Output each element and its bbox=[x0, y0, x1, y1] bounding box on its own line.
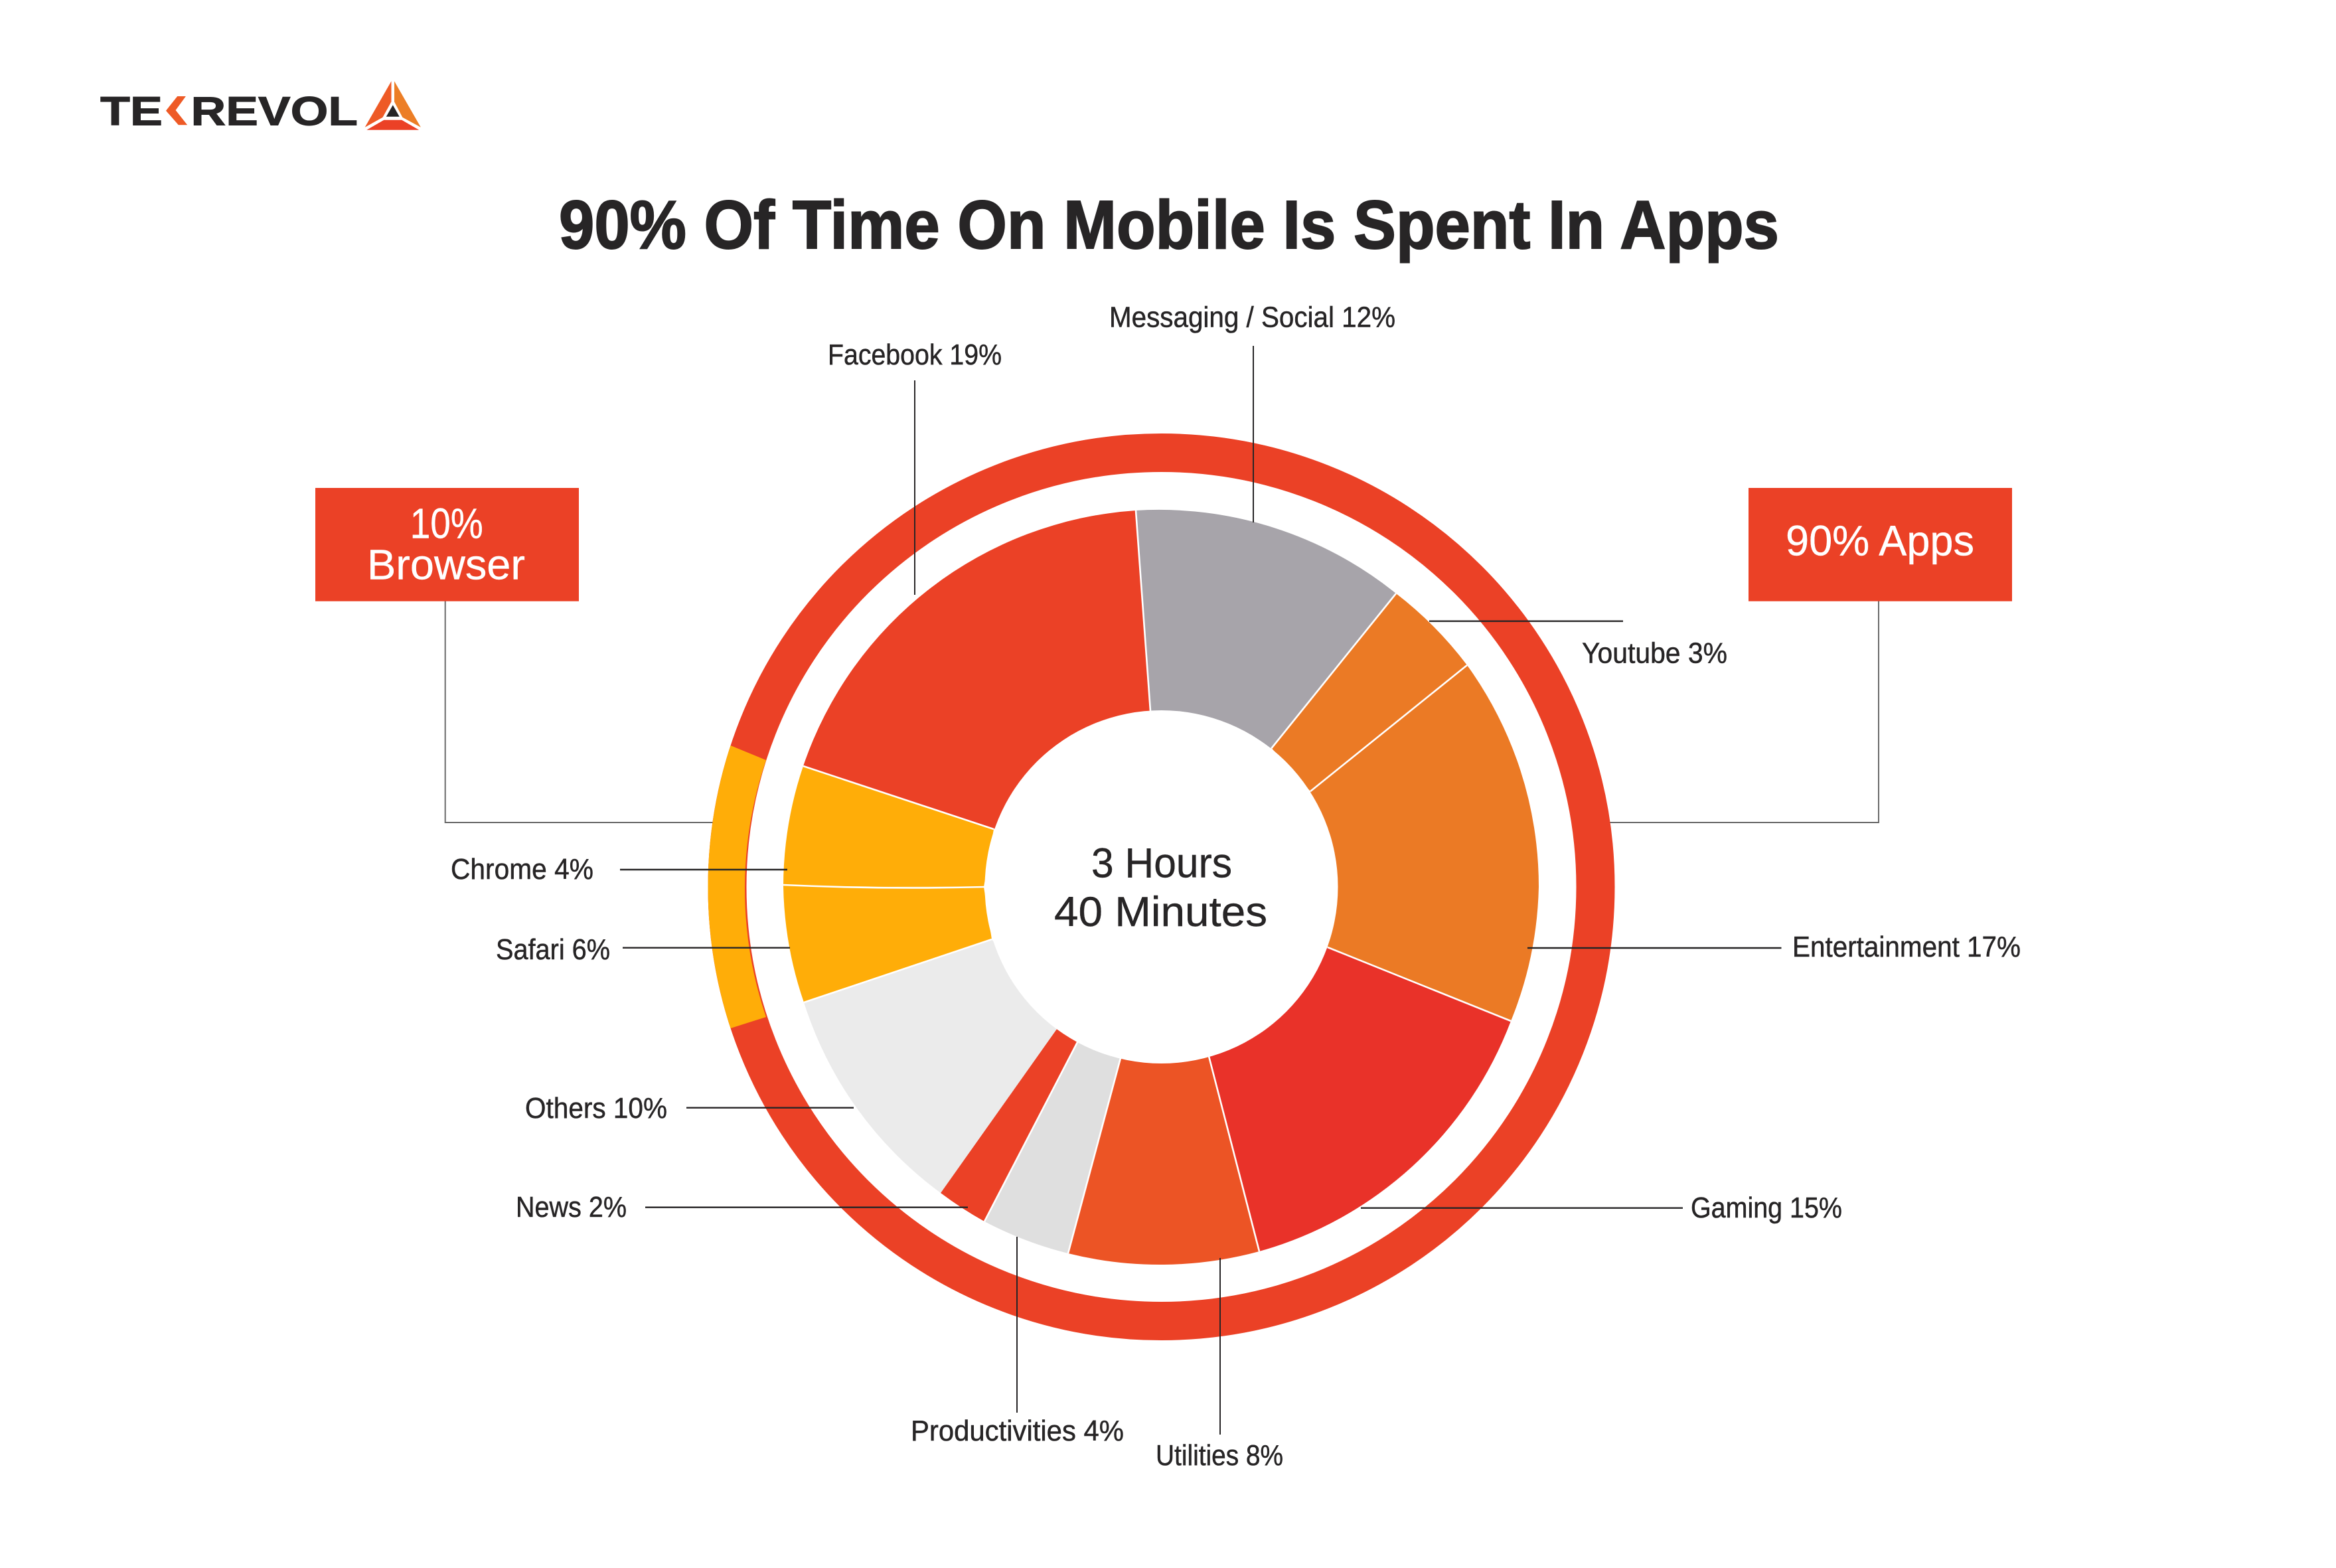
slice separators bbox=[783, 510, 1511, 1253]
connector: apps box to outer ring bbox=[1606, 601, 1879, 823]
outer ring segment: browser 10% bbox=[708, 745, 766, 1028]
center label: 3 Hours bbox=[1091, 840, 1232, 887]
leader and label: Chrome: Chrome 4% bbox=[451, 853, 593, 886]
slice: Facebook bbox=[803, 510, 1150, 829]
donut chart bbox=[783, 510, 1539, 1265]
callout box: 90% Apps bbox=[1749, 488, 2012, 601]
callout box: 10% Browser: 10% bbox=[410, 500, 483, 548]
leader and label: Utilities: Utilities 8% bbox=[1156, 1439, 1283, 1472]
leader and label: Gaming: Gaming 15% bbox=[1691, 1192, 1842, 1224]
title: 90% Of Time On Mobile Is Spent In Apps bbox=[559, 187, 1779, 263]
slice: Utilities bbox=[1068, 1056, 1259, 1265]
callout box: 10% Browser: Browser bbox=[367, 541, 525, 589]
slice: Youtube bbox=[1272, 593, 1467, 791]
leader and label: Safari: Safari 6% bbox=[496, 933, 610, 966]
leader and label: Youtube: Youtube 3% bbox=[1582, 637, 1727, 669]
leader and label: Messaging / Social: Messaging / Social 12% bbox=[1109, 301, 1395, 334]
leader and label: News: News 2% bbox=[516, 1191, 627, 1223]
slice: Chrome bbox=[783, 766, 994, 887]
slice: Productivities bbox=[984, 1042, 1121, 1253]
callout box: 90% Apps: 90% Apps bbox=[1786, 517, 1974, 565]
center label bbox=[1054, 840, 1267, 935]
slice: Entertainment bbox=[1310, 665, 1539, 1021]
leader and label: Productivities: Productivities 4% bbox=[911, 1415, 1124, 1447]
connector: browser box to outer ring bbox=[445, 601, 717, 823]
leader and label: Others: Others 10% bbox=[525, 1092, 667, 1125]
logo chevron bbox=[166, 96, 187, 125]
donut hole bbox=[985, 710, 1338, 1063]
slice: News bbox=[941, 1029, 1077, 1221]
outer ring: apps 90% bbox=[728, 453, 1596, 1321]
logo triangle mark bbox=[365, 81, 421, 130]
slice: Safari bbox=[783, 886, 992, 1002]
callout box: 10% Browser bbox=[315, 488, 579, 601]
leader and label: Entertainment: Entertainment 17% bbox=[1792, 931, 2021, 963]
leader and label: Facebook: Facebook 19% bbox=[828, 339, 1002, 371]
logo wordmark: REVOL: REVOL bbox=[191, 88, 358, 133]
logo wordmark: TE: TE bbox=[100, 88, 163, 133]
center label: 40 Minutes bbox=[1054, 889, 1267, 935]
logo: Tekrevol bbox=[100, 81, 421, 133]
slice: Messaging / Social bbox=[1136, 510, 1396, 748]
slice: Others bbox=[804, 939, 1057, 1193]
slice: Gaming bbox=[1209, 947, 1511, 1251]
